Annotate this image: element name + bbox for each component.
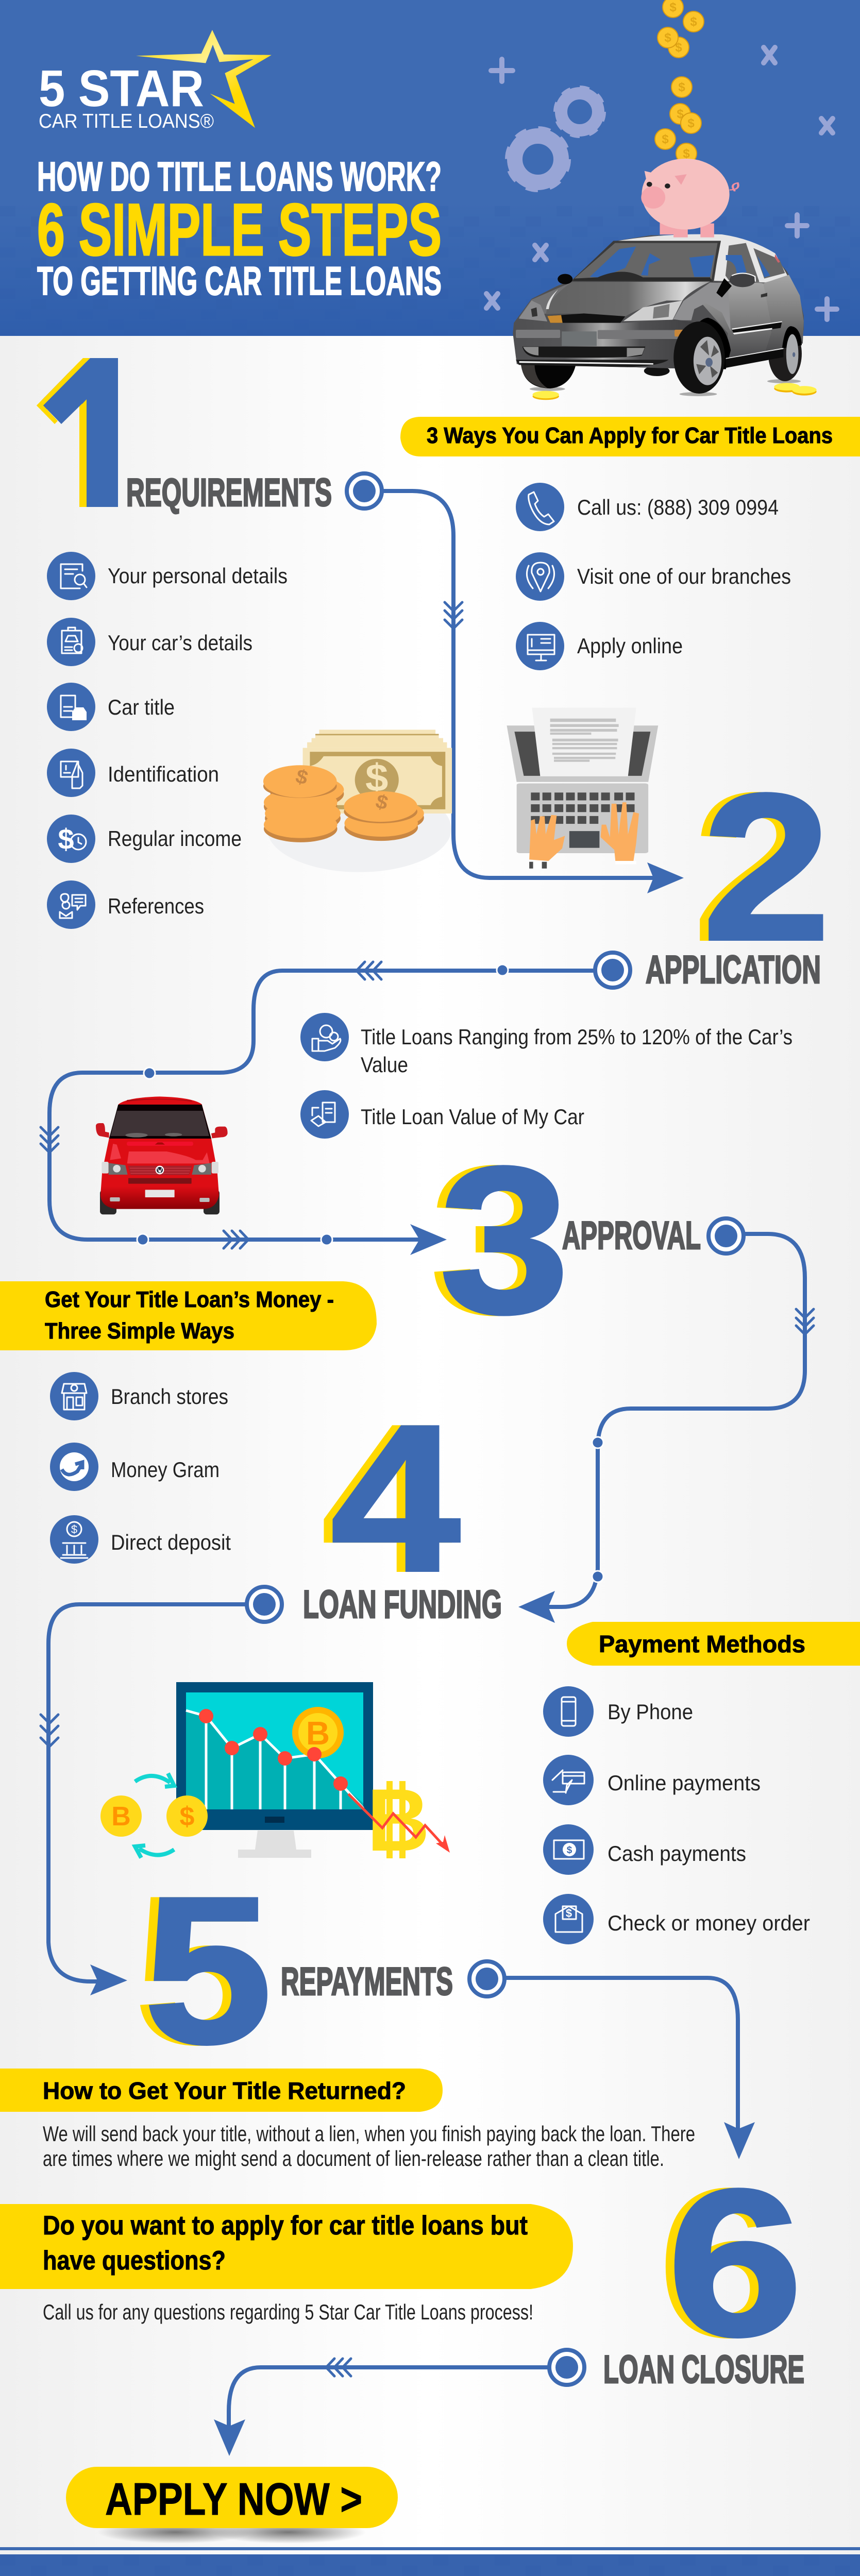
text block: call us: Call us for any questions regarding 5 Star Car Title Loans process! (43, 2300, 533, 2324)
title line 1: HOW DO TITLE LOANS WORK? (37, 154, 442, 199)
text block: title return explanation (43, 2122, 695, 2171)
falling gold coins: $ (664, 31, 671, 45)
illustration: bitcoin chart on monitor (100, 1682, 450, 1870)
falling gold coins: $ (678, 80, 685, 94)
item: money gram (50, 1443, 220, 1491)
item: call us (516, 483, 779, 531)
title line 2: 6 SIMPLE STEPS (37, 189, 442, 271)
illustration: grey car (513, 234, 817, 400)
yellow heading: have questions: have questions? (43, 2246, 226, 2276)
item: identification: Identification (108, 762, 219, 786)
item: personal details: Your personal details (108, 564, 288, 588)
illustration: cash and coins: $ (365, 757, 388, 800)
button: apply now (66, 2467, 398, 2544)
item: cash payments: Cash payments (608, 1841, 746, 1866)
cyan exchange arrows (135, 1773, 174, 1858)
step 2 number: 2 (694, 750, 822, 984)
item: direct deposit: Direct deposit (111, 1530, 231, 1554)
item: regular income: Regular income (108, 826, 242, 851)
item: online payments (543, 1755, 761, 1805)
item: branch stores (50, 1372, 228, 1420)
connector: step 6 to apply now (214, 2359, 549, 2456)
illustration: bitcoin chart on monitor: $ (180, 1802, 195, 1832)
yellow heading: how to get title returned: How to Get Your Title Returned? (43, 2077, 406, 2104)
item: check or money order: $ (566, 1907, 572, 1920)
red down arrow (348, 1794, 450, 1853)
connector: step 2 to step 3 (41, 962, 593, 1255)
item: online payments: Online payments (608, 1771, 761, 1795)
illustration: bitcoin chart on monitor: B (306, 1715, 330, 1752)
logo wordmark: 5 STAR (39, 60, 204, 117)
illustration: cash and coins: $ (293, 765, 311, 789)
falling gold coins: $ (669, 1, 677, 14)
step 5 heading: repayments: REPAYMENTS (281, 1960, 453, 2004)
illustration: cash and coins: $ (373, 790, 391, 814)
logo: 5 Star Car Title Loans (39, 30, 272, 132)
step 3 number: 3 (440, 1123, 569, 1357)
button: apply now: APPLY NOW > (105, 2473, 362, 2524)
icon: logo star (136, 30, 272, 128)
node: step 6 (549, 2350, 584, 2385)
illustration: laptop with document (507, 708, 658, 870)
connector: step 4 to step 5 (41, 1604, 245, 1995)
item: title loan range: Value (361, 1053, 408, 1077)
title line 3: TO GETTING CAR TITLE LOANS (37, 258, 442, 303)
panel: funding options list (50, 1372, 231, 1564)
step 3 heading: approval: APPROVAL (562, 1214, 701, 1258)
item: car details: Your car’s details (108, 631, 252, 655)
icon: gears (508, 88, 603, 189)
item: branch stores: Branch stores (111, 1384, 228, 1409)
item: visit branches (516, 552, 791, 601)
item: title loan range: Title Loans Ranging from 25% to 120% of the Car’s (361, 1025, 792, 1049)
item: references: References (108, 894, 204, 918)
step 1 number: 1 (18, 318, 155, 551)
connector: step 5 to step 6 (505, 1978, 755, 2159)
falling gold coins (655, 0, 704, 164)
item: check or money order: Check or money order (608, 1911, 810, 1935)
falling gold coins: $ (687, 116, 695, 130)
panel: requirements list (47, 552, 288, 929)
step 1 heading: requirements: REQUIREMENTS (126, 471, 332, 515)
monitor body (176, 1682, 373, 1830)
illustration: red van (96, 1096, 228, 1214)
item: money gram: Money Gram (111, 1458, 220, 1482)
node: step 1 (347, 473, 382, 509)
yellow heading: payment methods: Payment Methods (599, 1631, 805, 1657)
step 2 number: 2 (702, 750, 831, 984)
step 4 heading: loan funding: LOAN FUNDING (303, 1583, 502, 1626)
step 1 number (37, 358, 118, 507)
footer band (0, 2547, 860, 2576)
illustration: cash and coins (263, 730, 452, 872)
node: step 3 (709, 1218, 744, 1253)
item: direct deposit: $ (71, 1523, 77, 1536)
item: references (47, 880, 204, 929)
item: cash payments: $ (567, 1845, 572, 1856)
chart area (186, 1710, 363, 1809)
yellow heading: 3 ways (400, 417, 860, 456)
decorative plus and cross marks (486, 47, 837, 319)
item: call us: Call us: (888) 309 0994 (577, 495, 779, 519)
yellow heading: get your money: Three Simple Ways (45, 1318, 234, 1344)
node: step 4 (247, 1587, 282, 1622)
item: apply online: Apply online (577, 634, 683, 658)
monitor stand (255, 1831, 296, 1850)
item: regular income (47, 815, 242, 863)
step 4 number: 4 (322, 1381, 453, 1615)
item: visit branches: Visit one of our branches (577, 564, 791, 588)
item: personal details (47, 552, 288, 600)
panel: payment methods list (543, 1686, 810, 1944)
yellow heading: payment methods (567, 1622, 860, 1666)
connector: step 3 to step 4 (518, 1234, 814, 1623)
falling gold coins: $ (690, 15, 697, 29)
text block: title return explanation: We will send back your title, without a lien, when you finish paying back the loan. There (43, 2122, 695, 2146)
item: check or money order (543, 1894, 810, 1944)
chart points (199, 1709, 348, 1791)
step 6 number: 6 (667, 2146, 803, 2379)
item: value of my car (300, 1090, 584, 1139)
step 5 number: 5 (135, 1853, 263, 2087)
panel: approval items (300, 1013, 792, 1139)
header band (0, 0, 860, 336)
item: car title: Car title (108, 695, 175, 719)
item: by phone: By Phone (608, 1700, 693, 1724)
illustration: bitcoin chart on monitor: B (111, 1802, 131, 1832)
yellow heading: have questions (0, 2204, 573, 2289)
falling gold coins: $ (675, 41, 682, 55)
item: apply online (516, 622, 683, 670)
item: car title (47, 683, 175, 731)
icon: piggy bank (641, 159, 738, 238)
step 4 number: 4 (331, 1381, 462, 1615)
item: regular income: $ (58, 823, 74, 855)
yellow heading: how to get title returned (0, 2069, 443, 2112)
node: step 5 (469, 1961, 504, 1996)
node: step 2 (595, 953, 630, 988)
connector: step 1 to step 2 (384, 491, 684, 893)
step 3 number: 3 (431, 1123, 561, 1357)
falling gold coins: $ (677, 107, 684, 121)
text block: title return explanation: are times where we might send a document of lien-release rather than a clean title. (43, 2146, 664, 2171)
yellow heading: get your money: Get Your Title Loan’s Money - (45, 1287, 334, 1312)
step 1 number: 1 (26, 318, 164, 551)
item: cash payments (543, 1824, 746, 1875)
falling gold coins: $ (662, 132, 669, 146)
item: value of my car: Title Loan Value of My Car (361, 1105, 584, 1129)
small bitcoin coin (100, 1795, 142, 1837)
big bitcoin symbol: B (367, 1771, 430, 1870)
step 5 number: 5 (144, 1853, 272, 2087)
item: car details (47, 618, 252, 666)
title (37, 154, 442, 303)
panel: ways to apply list (516, 483, 791, 670)
yellow heading: get your money (0, 1281, 377, 1350)
falling gold coins: $ (683, 147, 690, 161)
item: identification (47, 749, 219, 797)
step 6 number: 6 (659, 2146, 794, 2379)
item: by phone (543, 1686, 693, 1737)
small dollar coin (166, 1795, 208, 1837)
yellow heading: have questions: Do you want to apply for car title loans but (43, 2211, 528, 2241)
item: title loan range (300, 1013, 792, 1077)
big coin on screen (292, 1707, 344, 1758)
logo subtitle: CAR TITLE LOANS® (39, 110, 214, 132)
item: direct deposit (50, 1515, 231, 1564)
